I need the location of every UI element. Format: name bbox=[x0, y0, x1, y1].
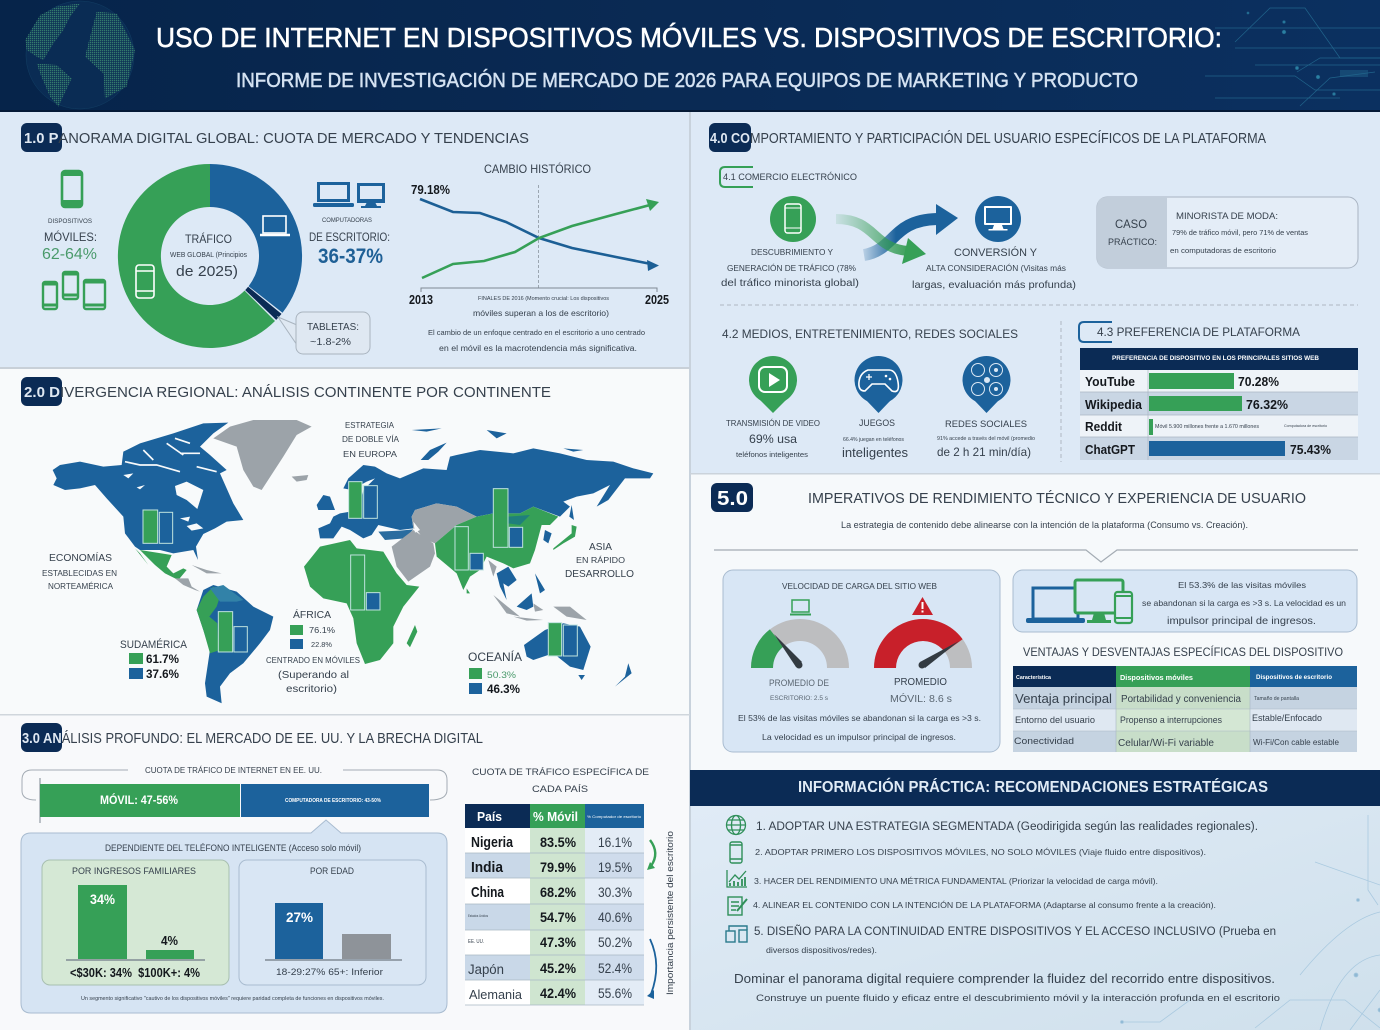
recommendation 1: 1. ADOPTAR UNA ESTRATEGIA SEGMENTADA (Geodirigida según las realidades regionales). bbox=[756, 821, 1258, 833]
bar chart: by age: 18-29:27% 65+: Inferior bbox=[276, 967, 383, 978]
world map: Eurasia Africa Oceania bbox=[304, 428, 653, 687]
panel: strategic recommendations bbox=[690, 770, 1380, 1030]
table: traffic by country: Japón bbox=[468, 962, 504, 977]
social label: REDES SOCIALES bbox=[945, 419, 1027, 429]
callout: tablets bbox=[278, 312, 370, 354]
turkey bbox=[378, 529, 413, 540]
subsection 4.3 platform preference: Computadora de escritorio bbox=[1284, 423, 1328, 428]
table: traffic by country: 50.2% bbox=[598, 934, 632, 950]
streaming label bbox=[726, 419, 820, 459]
subsection 4.2 media: 4.2 MEDIOS, ENTRETENIMIENTO, REDES SOCIALES bbox=[722, 327, 1018, 341]
table: traffic by country: China bbox=[471, 884, 505, 901]
label: North America: ECONOMÍAS bbox=[49, 551, 112, 564]
section badge 5.0: 5.0 bbox=[717, 488, 748, 510]
panel: device abandonment note: El 53.3% de las visitas móviles bbox=[1178, 580, 1306, 590]
subtitle: INFORME DE INVESTIGACIÓN DE MERCADO DE 2026 PARA EQUIPOS DE MARKETING Y PRODUCTO bbox=[236, 69, 1138, 92]
case study box: CASO bbox=[1115, 217, 1147, 231]
donut chart bbox=[118, 164, 302, 348]
social label bbox=[937, 419, 1035, 459]
rotated note: Importancia persistente del escritorio bbox=[665, 831, 676, 995]
label: Europe strategy: ESTRATEGIA bbox=[345, 420, 394, 430]
table: device pros and cons: Propenso a interrupciones bbox=[1120, 715, 1222, 725]
korea bbox=[543, 530, 552, 543]
gauge: desktop bbox=[762, 630, 838, 668]
legend: Africa: (Superando al bbox=[278, 669, 349, 681]
subsection 4.3 platform preference: PREFERENCIA DE DISPOSITIVO EN LOS PRINCIPALES SITIOS WEB bbox=[1112, 355, 1319, 362]
footnote: Un segmento significativo "cautivo de los dispositivos móviles" requiere paridad completa de funciones en dispositivos móviles. bbox=[81, 996, 384, 1002]
banner heading: INFORMACIÓN PRÁCTICA: RECOMENDACIONES ESTRATÉGICAS bbox=[798, 777, 1268, 796]
subsection 4.3 platform preference: ChatGPT bbox=[1085, 442, 1135, 457]
panel: smartphone dependent: DEPENDIENTE DEL TELÉFONO INTELIGENTE (Acceso solo móvil) bbox=[105, 843, 361, 853]
icon: mobile devices group bbox=[43, 272, 105, 309]
legend: South America bbox=[120, 638, 188, 681]
closing statement: Construye un puente fluido y eficaz entre el descubrimiento móvil y la interacción profunda en el escritorio bbox=[756, 993, 1280, 1004]
bar chart: by income: <$30K: 34% $100K+: 4% bbox=[70, 966, 200, 980]
heading 2.0: 2.0 DIVERGENCIA REGIONAL: ANÁLISIS CONTINENTE POR CONTINENTE bbox=[24, 384, 551, 401]
line chart: historic shift: El cambio de un enfoque centrado en el escritorio a uno centrado bbox=[428, 328, 645, 337]
table: device pros and cons: Celular/Wi-Fi variable bbox=[1118, 738, 1214, 749]
legend: Oceania: OCEANÍA bbox=[468, 649, 522, 664]
icon: social pin bbox=[962, 356, 1010, 413]
donut centre text: WEB GLOBAL (Principios bbox=[170, 252, 247, 259]
table: device pros and cons: Ventaja principal bbox=[1015, 691, 1112, 706]
icon: conversion circle bbox=[975, 196, 1021, 242]
heading 4.0: 4.0 COMPORTAMIENTO Y PARTICIPACIÓN DEL USUARIO ESPECÍFICOS DE LA PLATAFORMA bbox=[710, 130, 1266, 147]
heading 1.0: 1.0 PANORAMA DIGITAL GLOBAL: CUOTA DE MERCADO Y TENDENCIAS bbox=[24, 130, 529, 147]
legend: South America: 37.6% bbox=[146, 667, 179, 681]
icon: chart bbox=[727, 870, 747, 887]
donut centre text bbox=[170, 231, 247, 280]
table: traffic by country: 54.7% bbox=[540, 909, 576, 925]
recommendation 4: 4. ALINEAR EL CONTENIDO CON LA INTENCIÓN DE LA PLATAFORMA (Adaptarse al consumo frente a la creación). bbox=[753, 901, 1216, 910]
icon: video pin bbox=[749, 356, 797, 413]
label: Asia: ASIA bbox=[589, 542, 612, 553]
subsection 4.2 media bbox=[722, 327, 1035, 460]
stacked bar: US traffic share bbox=[22, 766, 447, 823]
label: North America bbox=[42, 551, 117, 591]
section badge 3.0 bbox=[21, 723, 62, 752]
header banner bbox=[0, 0, 1380, 112]
panel: device abandonment note: se abandonan si la carga es >3 s. La velocidad es un bbox=[1142, 598, 1346, 608]
section badge 4.0 bbox=[709, 123, 751, 152]
india and china bbox=[435, 507, 558, 593]
line chart: historic shift: CAMBIO HISTÓRICO bbox=[484, 161, 591, 176]
russia and europe bbox=[318, 448, 653, 538]
icon: devices bbox=[726, 926, 747, 942]
gauge labels: La velocidad es un impulsor principal de ingresos. bbox=[762, 732, 956, 742]
icon: laptop green bbox=[790, 600, 811, 614]
recommendation 5: diversos dispositivos/redes). bbox=[766, 946, 877, 955]
line chart: historic shift: en el móvil es la macrotendencia más significativa. bbox=[439, 344, 637, 353]
table: traffic by country: 68.2% bbox=[540, 884, 576, 900]
table: device pros and cons: Tamaño de pantalla bbox=[1254, 696, 1299, 702]
games label: inteligentes bbox=[842, 446, 908, 460]
south america bbox=[197, 585, 273, 703]
panel: 2.0 regional divergence bbox=[21, 377, 653, 703]
games label: JUEGOS bbox=[859, 418, 895, 428]
table: traffic by country: India bbox=[471, 859, 504, 876]
discovery label bbox=[721, 248, 859, 289]
icon: globe bbox=[726, 816, 746, 834]
case study box: en computadoras de escritorio bbox=[1170, 248, 1276, 255]
section badge 5.0 bbox=[711, 483, 753, 512]
stacked bar: US traffic share: CUOTA DE TRÁFICO DE INTERNET EN EE. UU. bbox=[145, 766, 322, 775]
stacked bar: US traffic share: COMPUTADORA DE ESCRITORIO: 43-50% bbox=[285, 798, 381, 804]
subsection 4.3 platform preference: 70.28% bbox=[1238, 374, 1279, 389]
gauge labels: PROMEDIO DE bbox=[769, 678, 829, 689]
icon: laptop monitor phone bbox=[1026, 580, 1132, 623]
subsection 4.1 ecommerce: 4.1 COMERCIO ELECTRÓNICO bbox=[723, 172, 857, 182]
arrow: green flow bbox=[836, 219, 926, 264]
case study box: 79% de tráfico móvil, pero 71% de ventas bbox=[1172, 230, 1309, 237]
subsection 4.3 platform preference: 76.32% bbox=[1246, 397, 1288, 412]
table: traffic by country: Estados Unidos bbox=[468, 913, 488, 918]
label: Europe strategy: DE DOBLE VÍA bbox=[342, 434, 399, 444]
recommendation 5 bbox=[754, 925, 1276, 955]
gauge labels: ESCRITORIO: 2.5 s bbox=[770, 695, 829, 702]
table: device pros and cons: Dispositivos móviles bbox=[1120, 673, 1193, 682]
table: traffic by country: 30.3% bbox=[598, 884, 632, 900]
icon: mobile phone bbox=[62, 171, 82, 207]
case study box: MINORISTA DE MODA: bbox=[1176, 211, 1278, 222]
streaming label: 69% usa bbox=[749, 432, 797, 446]
label: Asia: EN RÁPIDO bbox=[576, 555, 625, 565]
africa bbox=[304, 540, 419, 664]
table: device pros and cons: Entorno del usuario bbox=[1015, 715, 1095, 725]
table: device pros and cons: Estable/Enfocado bbox=[1252, 713, 1322, 723]
table: traffic by country: 45.2% bbox=[540, 960, 576, 976]
gauge labels bbox=[738, 677, 981, 742]
southeast asia bbox=[488, 560, 587, 621]
games label: 66.4% juegan en teléfonos bbox=[843, 437, 905, 443]
gauge labels: PROMEDIO bbox=[894, 677, 947, 688]
discovery label: del tráfico minorista global) bbox=[721, 277, 859, 289]
legend: Oceania bbox=[468, 649, 522, 696]
panel: 5.0 technical performance bbox=[711, 483, 1358, 752]
table: device pros and cons bbox=[1013, 666, 1357, 752]
subsection 4.3 platform preference: Reddit bbox=[1085, 419, 1123, 434]
social label: de 2 h 21 min/día) bbox=[937, 445, 1031, 459]
subsection 4.3 platform preference: YouTube bbox=[1085, 374, 1135, 389]
case study box: PRÁCTICO: bbox=[1108, 237, 1157, 247]
line chart: historic shift: 2013 bbox=[409, 293, 433, 307]
decoration: network bbox=[1120, 815, 1380, 1030]
recommendation 5: 5. DISEÑO PARA LA CONTINUIDAD ENTRE DISPOSITIVOS Y EL ACCESO INCLUSIVO (Prueba en bbox=[754, 925, 1276, 938]
table: device pros and cons: Dispositivos de escritorio bbox=[1256, 675, 1332, 681]
icon: phone in donut bbox=[136, 265, 154, 298]
legend: Africa: ÁFRICA bbox=[293, 608, 331, 621]
subsection 4.1 ecommerce bbox=[720, 167, 1358, 291]
heading 5.0: IMPERATIVOS DE RENDIMIENTO TÉCNICO Y EXPERIENCIA DE USUARIO bbox=[808, 490, 1306, 507]
subsection 4.3 platform preference: Wikipedia bbox=[1085, 397, 1143, 412]
table: device pros and cons: Wi-Fi/Con cable estable bbox=[1253, 738, 1340, 747]
line chart: historic shift: 79.18% bbox=[411, 183, 450, 197]
table: traffic by country: 47.3% bbox=[540, 934, 576, 950]
table: traffic by country: % Móvil bbox=[533, 809, 578, 824]
panel: 4.0 platform behaviour bbox=[709, 123, 1358, 462]
closing statement: Dominar el panorama digital requiere comprender la fluidez del recorrido entre dispositivos. bbox=[734, 972, 1275, 986]
mexico bbox=[135, 548, 187, 580]
bar chart: by income: 4% bbox=[161, 933, 178, 948]
desktop share text: COMPUTADORAS bbox=[322, 217, 373, 224]
panel: 1.0 global digital landscape bbox=[21, 123, 669, 354]
mobile share text: MÓVILES: bbox=[44, 229, 97, 244]
donut centre text: de 2025) bbox=[176, 263, 238, 280]
games label bbox=[842, 418, 908, 460]
table: traffic by country bbox=[465, 767, 649, 1005]
panel: 3.0 US deep dive bbox=[21, 723, 676, 1013]
table: traffic by country: País bbox=[477, 809, 502, 824]
subsection 4.3 platform preference bbox=[1079, 322, 1358, 460]
subsection 4.3 platform preference: 4.3 PREFERENCIA DE PLATAFORMA bbox=[1097, 325, 1300, 339]
table: traffic by country: % Computador de escritorio bbox=[587, 814, 642, 819]
legend: Africa: escritorio) bbox=[286, 683, 337, 695]
label: North America: NORTEAMÉRICA bbox=[48, 582, 114, 591]
bar chart: by income: POR INGRESOS FAMILIARES bbox=[72, 866, 196, 876]
oceania bbox=[524, 623, 632, 687]
callout: tablets: ~1.8-2% bbox=[310, 336, 351, 348]
table: traffic by country: 83.5% bbox=[540, 834, 576, 850]
icon: laptop and monitor bbox=[313, 182, 385, 208]
label: Europe strategy bbox=[342, 420, 399, 459]
icon: phone bbox=[730, 842, 742, 863]
line chart: historic shift: móviles superan a los de escritorio) bbox=[473, 308, 609, 318]
conversion label bbox=[912, 246, 1076, 291]
gauge labels: El 53% de las visitas móviles se abandonan si la carga es >3 s. bbox=[738, 713, 981, 723]
table: traffic by country: 19.5% bbox=[598, 859, 632, 875]
arrow: blue trend bbox=[647, 939, 656, 999]
label: Europe strategy: EN EUROPA bbox=[343, 449, 397, 459]
icon: discovery circle bbox=[770, 196, 816, 242]
line chart: historic shift: 2025 bbox=[645, 293, 669, 307]
central asia and middle east bbox=[392, 503, 477, 582]
discovery label: GENERACIÓN DE TRÁFICO (78% bbox=[727, 263, 856, 273]
case study box bbox=[1097, 197, 1358, 268]
mobile share text: DISPOSITIVOS bbox=[48, 218, 93, 225]
panel: page load speed gauges: VELOCIDAD DE CARGA DEL SITIO WEB bbox=[782, 581, 937, 591]
bar chart: by income: 34% bbox=[90, 891, 115, 907]
recommendation 3: 3. HACER DEL RENDIMIENTO UNA MÉTRICA FUNDAMENTAL (Priorizar la velocidad de carga móvil). bbox=[754, 876, 1158, 886]
heading: device pros and cons: VENTAJAS Y DESVENTAJAS ESPECÍFICAS DEL DISPOSITIVO bbox=[1023, 646, 1343, 659]
table: traffic by country: 79.9% bbox=[540, 859, 576, 875]
desktop share text bbox=[309, 217, 390, 268]
panel: device abandonment note bbox=[1013, 570, 1357, 632]
table: device pros and cons: Portabilidad y conveniencia bbox=[1121, 694, 1241, 705]
line chart: historic shift: FINALES DE 2016 (Momento crucial: Los dispositivos bbox=[478, 296, 609, 302]
stacked bar: US traffic share: MÓVIL: 47-56% bbox=[100, 794, 178, 807]
table: traffic by country: EE. UU. bbox=[468, 939, 484, 945]
table: device pros and cons: Conectividad bbox=[1014, 736, 1074, 747]
table: traffic by country: 16.1% bbox=[598, 834, 632, 850]
icon: laptop in donut bbox=[260, 216, 290, 235]
arrow: green trend bbox=[647, 840, 655, 870]
arrow: blue flow bbox=[864, 204, 958, 255]
bar chart: by age: POR EDAD bbox=[310, 866, 354, 876]
bars: europe asia africa oceania bbox=[349, 482, 577, 656]
line chart: historic shift bbox=[409, 161, 669, 353]
table: traffic by country: 40.6% bbox=[598, 909, 632, 925]
legend: Oceania: 50.3% bbox=[487, 670, 517, 681]
panel: smartphone dependent bbox=[21, 820, 447, 1013]
label: Asia: DESARROLLO bbox=[565, 568, 634, 580]
streaming label: teléfonos inteligentes bbox=[736, 452, 809, 459]
table: traffic by country: CUOTA DE TRÁFICO ESPECÍFICA DE bbox=[472, 767, 649, 778]
mobile share text: 62-64% bbox=[42, 246, 97, 263]
recommendation 2: 2. ADOPTAR PRIMERO LOS DISPOSITIVOS MÓVILES, NO SOLO MÓVILES (Viaje fluido entre dispositivos). bbox=[755, 847, 1206, 857]
table: traffic by country: 55.6% bbox=[598, 985, 632, 1001]
decoration: circuit lines bbox=[1205, 8, 1380, 106]
label: North America: ESTABLECIDAS EN bbox=[42, 569, 117, 578]
japan bbox=[553, 525, 577, 550]
legend: Africa: 22.8% bbox=[311, 642, 332, 649]
closing statement bbox=[734, 972, 1280, 1004]
icon: dotted globe bbox=[25, 1, 135, 109]
bar chart: by age: 27% bbox=[286, 909, 314, 925]
heading 3.0: 3.0 ANÁLISIS PROFUNDO: EL MERCADO DE EE. UU. Y LA BRECHA DIGITAL bbox=[22, 730, 483, 747]
gauge: mobile bbox=[885, 630, 961, 668]
desktop share text: 36-37% bbox=[318, 245, 383, 268]
streaming label: TRANSMISIÓN DE VIDEO bbox=[726, 419, 820, 428]
table: traffic by country: 42.4% bbox=[540, 985, 576, 1001]
conversion label: largas, evaluación más profunda) bbox=[912, 279, 1076, 291]
bar chart: by income bbox=[42, 860, 229, 985]
bar chart: by age bbox=[239, 860, 426, 985]
title: USO DE INTERNET EN DISPOSITIVOS MÓVILES VS. DISPOSITIVOS DE ESCRITORIO: bbox=[156, 22, 1222, 53]
legend: Africa: 76.1% bbox=[309, 625, 335, 635]
legend: South America: SUDAMÉRICA bbox=[120, 638, 188, 651]
subheading 5.0: La estrategia de contenido debe alinearse con la intención de la plataforma (Consumo vs. Creación). bbox=[841, 520, 1248, 531]
mobile share text bbox=[42, 218, 97, 263]
section badge 2.0 bbox=[21, 377, 62, 406]
banner bbox=[690, 770, 1380, 806]
panel: page load speed gauges bbox=[723, 570, 1000, 752]
bars: north and south america bbox=[143, 510, 247, 652]
table: traffic by country: Alemania bbox=[469, 987, 523, 1002]
conversion label: ALTA CONSIDERACIÓN (Visitas más bbox=[926, 264, 1066, 273]
discovery label: DESCUBRIMIENTO Y bbox=[751, 248, 834, 257]
gauge labels: MÓVIL: 8.6 s bbox=[890, 692, 952, 705]
greenland and iceland bbox=[213, 420, 312, 490]
world map: Americas and Greenland bbox=[50, 420, 312, 703]
icon: document bbox=[728, 897, 747, 915]
icon: warning triangle bbox=[912, 597, 933, 615]
donut centre text: TRÁFICO bbox=[185, 231, 232, 246]
table: traffic by country: Nigeria bbox=[471, 834, 514, 851]
central america and caribbean bbox=[175, 565, 222, 592]
desktop share text: DE ESCRITORIO: bbox=[309, 232, 390, 244]
subsection 4.3 platform preference: 75.43% bbox=[1290, 442, 1331, 457]
table: device pros and cons: Característica bbox=[1016, 675, 1051, 681]
icon: gamepad pin bbox=[854, 356, 902, 413]
label: Asia bbox=[565, 542, 634, 580]
social label: 91% accede a través del móvil (promedio bbox=[937, 436, 1035, 442]
legend: Africa bbox=[265, 608, 361, 695]
table: traffic by country: CADA PAÍS bbox=[532, 784, 588, 795]
panel: device abandonment note: impulsor principal de ingresos. bbox=[1167, 615, 1316, 627]
conversion label: CONVERSIÓN Y bbox=[954, 246, 1038, 259]
legend: Africa: CENTRADO EN MÓVILES bbox=[266, 656, 360, 665]
legend: Oceania: 46.3% bbox=[487, 682, 520, 696]
table: traffic by country: 52.4% bbox=[598, 960, 632, 976]
subsection 4.3 platform preference: Móvil 5.900 millones frente a 1.670 millones bbox=[1155, 424, 1260, 430]
legend: South America: 61.7% bbox=[146, 652, 179, 666]
callout: tablets: TABLETAS: bbox=[307, 321, 359, 333]
section badge 1.0 bbox=[21, 123, 62, 152]
hudson bay, lakes and arctic channels bbox=[123, 473, 203, 531]
